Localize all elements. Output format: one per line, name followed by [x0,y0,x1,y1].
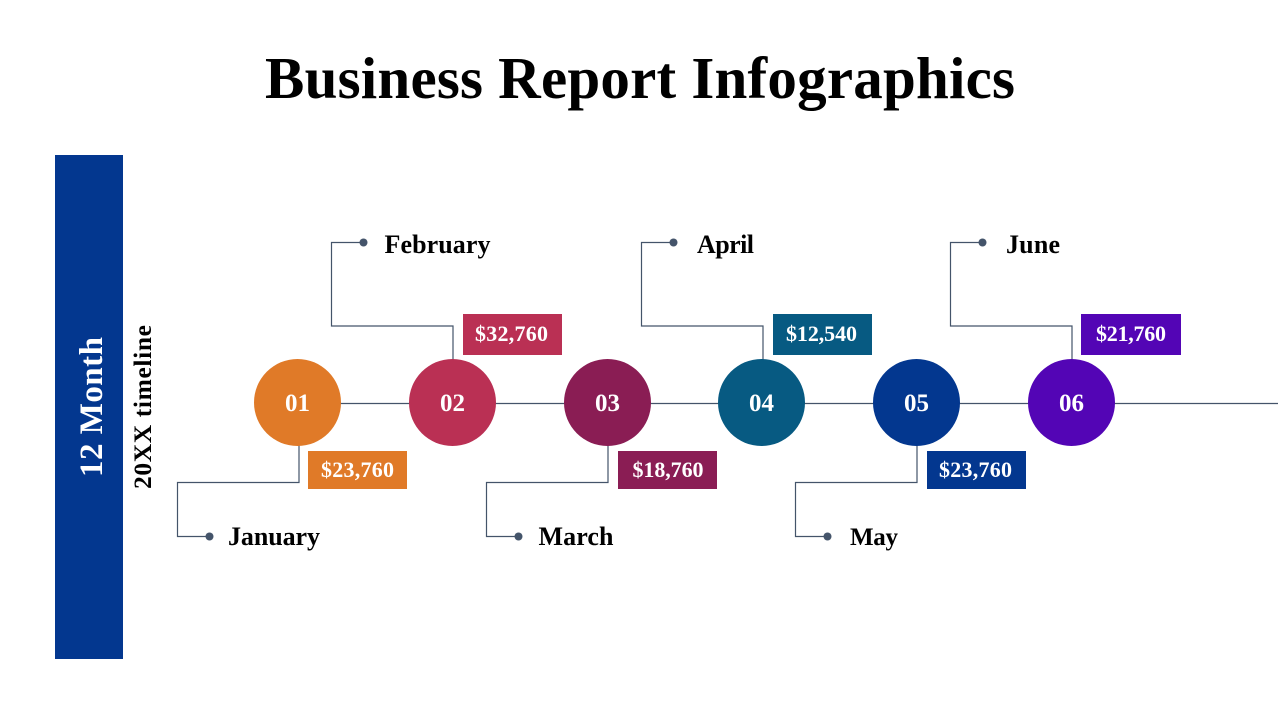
milestone 06: June: 06 [1059,390,1084,417]
milestone 06: June [950,230,1181,446]
milestone 02: February [332,230,562,446]
milestone 04: April: 04 [749,390,774,417]
milestone 01: January: January [228,522,320,551]
milestone 04: April [642,230,872,446]
milestone 04: April: $12,540 [786,321,857,346]
milestone 02: February: 02 [440,390,465,417]
milestone 04: April: April [697,230,754,259]
milestone 03: March: 03 [595,390,620,417]
side panel: 12 Month: 12 Month [74,337,110,477]
title: Business Report Infographics [265,45,1015,111]
milestone 03: March [486,359,717,551]
milestone 01: January: $23,760 [321,457,394,482]
milestone 06: June: June [1006,230,1060,259]
milestone 03: March: $18,760 [632,457,704,482]
milestone 01: January: 01 [285,390,310,417]
timeline axis [298,402,1278,404]
subtitle: 20XX timeline: 20XX timeline [128,325,157,489]
milestone 05: May: 05 [904,390,929,417]
side panel: 12 Month [55,155,123,659]
milestone 05: May [796,359,1026,551]
milestone 02: February: $32,760 [475,321,548,346]
milestone 06: June: $21,760 [1096,321,1166,346]
milestone 05: May: $23,760 [939,457,1012,482]
milestone 01: January [178,359,407,551]
milestone 02: February: February [384,230,490,259]
milestone 05: May: May [850,524,898,551]
milestone 03: March: March [538,522,614,551]
